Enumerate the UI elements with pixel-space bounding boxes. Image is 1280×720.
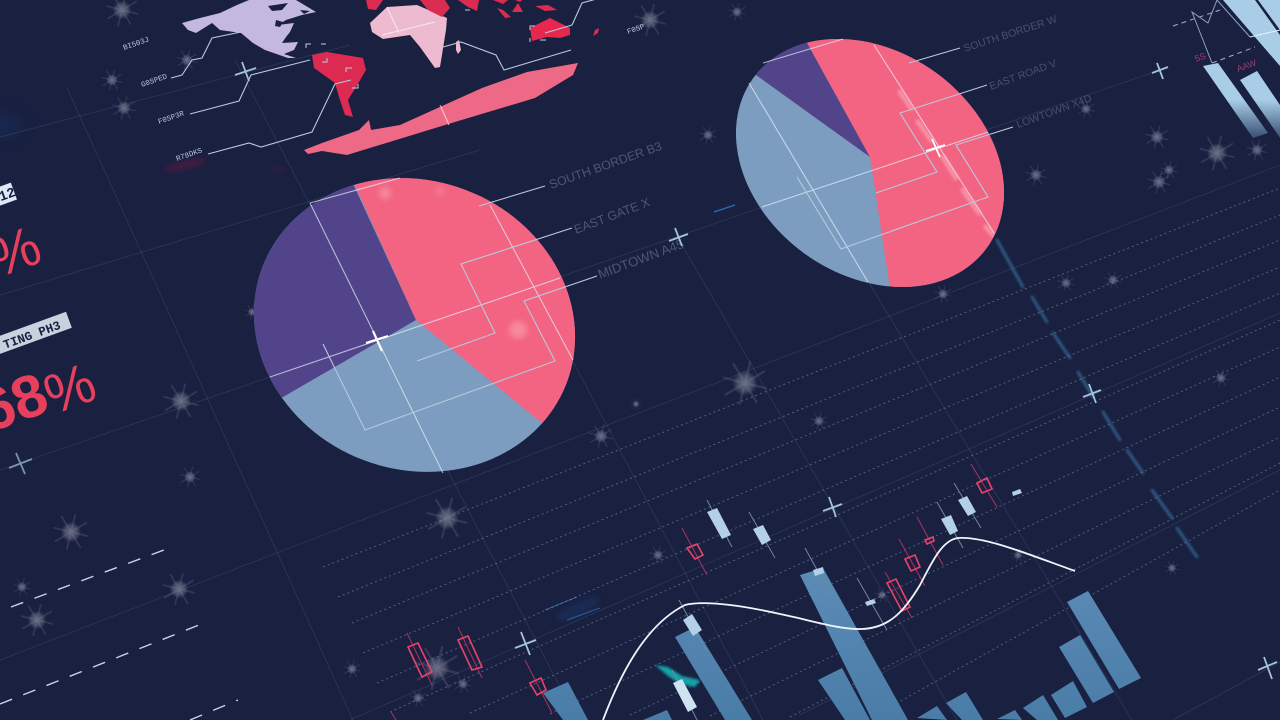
pie chart: small — [736, 38, 1004, 287]
map labels: G0SPED — [140, 73, 169, 90]
pie cross — [926, 139, 945, 157]
dashed lines bottom-left — [0, 547, 238, 720]
North America — [182, 0, 316, 58]
tag: TING PH3: TING PH3 — [2, 319, 63, 353]
teal glow — [655, 665, 700, 687]
Australia — [530, 18, 570, 41]
pie 2 labels: LOWTOWN X4D — [1015, 92, 1094, 131]
North America lakes — [268, 3, 310, 27]
map labels: R78DKS — [175, 147, 204, 164]
blue highlight dashes — [997, 240, 1197, 557]
left stat block — [0, 182, 104, 445]
map labels: BI503J — [122, 36, 151, 53]
map labels — [122, 23, 646, 164]
pie chart: large — [254, 178, 576, 474]
pie overlay lines — [270, 178, 573, 473]
pie overlay lines — [749, 39, 994, 282]
map labels: F0SP3R — [157, 110, 186, 127]
top-right bar chart: 5S — [1193, 51, 1207, 64]
Eurasia and Oceania — [366, 0, 599, 36]
trend curve — [603, 538, 1075, 720]
pie 2 labels: SOUTH BORDER W — [962, 13, 1059, 55]
Madagascar — [456, 40, 461, 54]
percent sign: % — [36, 350, 104, 426]
map labels: F0SP — [626, 23, 646, 37]
world map — [182, 0, 599, 155]
pie 1 labels: EAST GATE X — [572, 195, 652, 237]
pie 1 labels: SOUTH BORDER B3 — [547, 139, 664, 192]
Antarctica — [304, 63, 578, 155]
top-right bar chart: AAW — [1235, 57, 1258, 74]
pie cross — [366, 331, 388, 351]
South America — [312, 52, 366, 117]
glows — [0, 115, 735, 625]
pie 2 labels — [797, 13, 1094, 249]
tag: TING PH3 — [0, 312, 72, 357]
map callout lines — [171, 0, 600, 154]
pie 1 labels — [323, 139, 686, 430]
candlestick chart — [391, 464, 1022, 720]
pie 2 labels: EAST ROAD V — [988, 57, 1058, 93]
Africa — [370, 5, 447, 68]
top-right bar chart — [1173, 0, 1280, 138]
pie 1 labels: MIDTOWN A45 — [596, 236, 686, 282]
dotted chart lines — [323, 188, 1280, 718]
bar chart — [543, 568, 1141, 720]
